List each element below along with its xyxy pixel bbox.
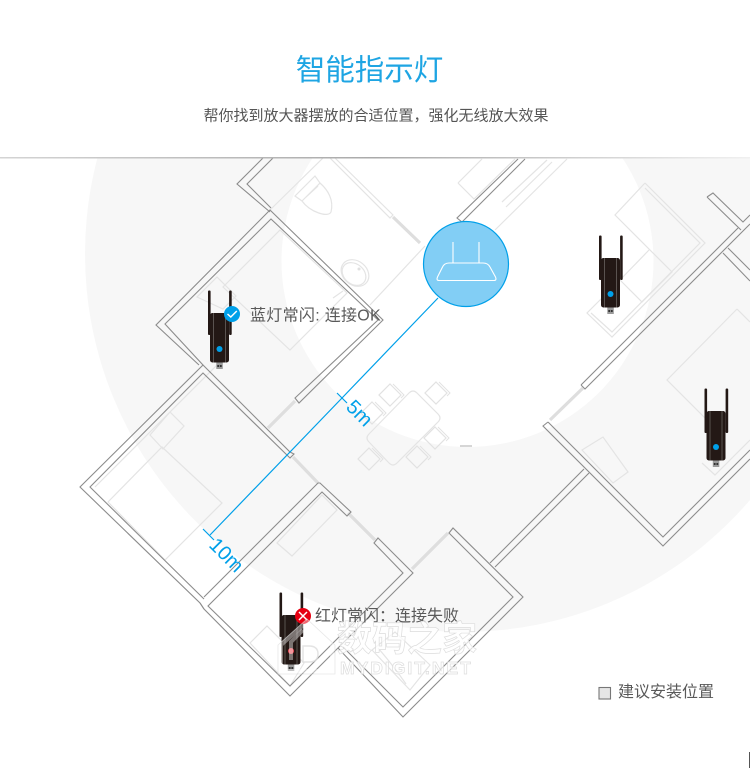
extender: right — [704, 388, 728, 467]
watermark name: 数码之家 — [337, 620, 477, 659]
wall: bottom room — [338, 528, 523, 717]
distance line — [203, 298, 438, 540]
extender: red fail — [280, 592, 303, 671]
coverage map — [79, 158, 750, 718]
wall: bedroom two — [80, 365, 294, 609]
extender: blue OK — [208, 290, 232, 369]
divider — [0, 157, 750, 158]
dining chairs — [358, 382, 450, 470]
wall: upper bathroom — [237, 158, 273, 212]
legend: 建议安装位置 — [618, 683, 714, 701]
furniture outlines — [95, 158, 750, 690]
furniture: upper right bed — [587, 183, 705, 337]
walls — [80, 158, 750, 717]
furniture: bathroom walls — [270, 158, 425, 305]
extender: upper right — [599, 236, 623, 314]
toilet — [295, 176, 332, 214]
door openings — [268, 217, 583, 569]
label: red light: 红灯常闪：连接失败 — [315, 607, 459, 625]
router icon — [424, 222, 508, 306]
label: 10m: 10m — [204, 534, 248, 577]
subtitle: 帮你找到放大器摆放的合适位置，强化无线放大效果 — [203, 108, 549, 124]
5m coverage circle — [282, 75, 654, 447]
washbasin — [340, 259, 370, 287]
watermark — [278, 619, 477, 678]
wall: corridor — [490, 469, 589, 567]
10m coverage ring — [85, 0, 750, 632]
status icon: cross — [295, 608, 311, 624]
status icon: check — [224, 306, 240, 322]
wall: long diagonal — [581, 224, 750, 389]
label: blue light: 蓝灯常闪: 连接OK — [250, 306, 381, 324]
label: 5m: 5m — [341, 396, 377, 431]
wall: bedroom one — [156, 210, 383, 403]
watermark url: MYDIGIT.NET — [340, 658, 473, 678]
wall: top right — [707, 193, 750, 281]
title: 智能指示灯 — [296, 54, 443, 87]
corner mark — [749, 752, 750, 768]
wall: top centre — [457, 159, 525, 222]
dining table — [367, 391, 440, 465]
watermark logo — [278, 619, 335, 674]
wall: right room — [543, 422, 750, 546]
wall: bedroom three — [200, 483, 413, 696]
